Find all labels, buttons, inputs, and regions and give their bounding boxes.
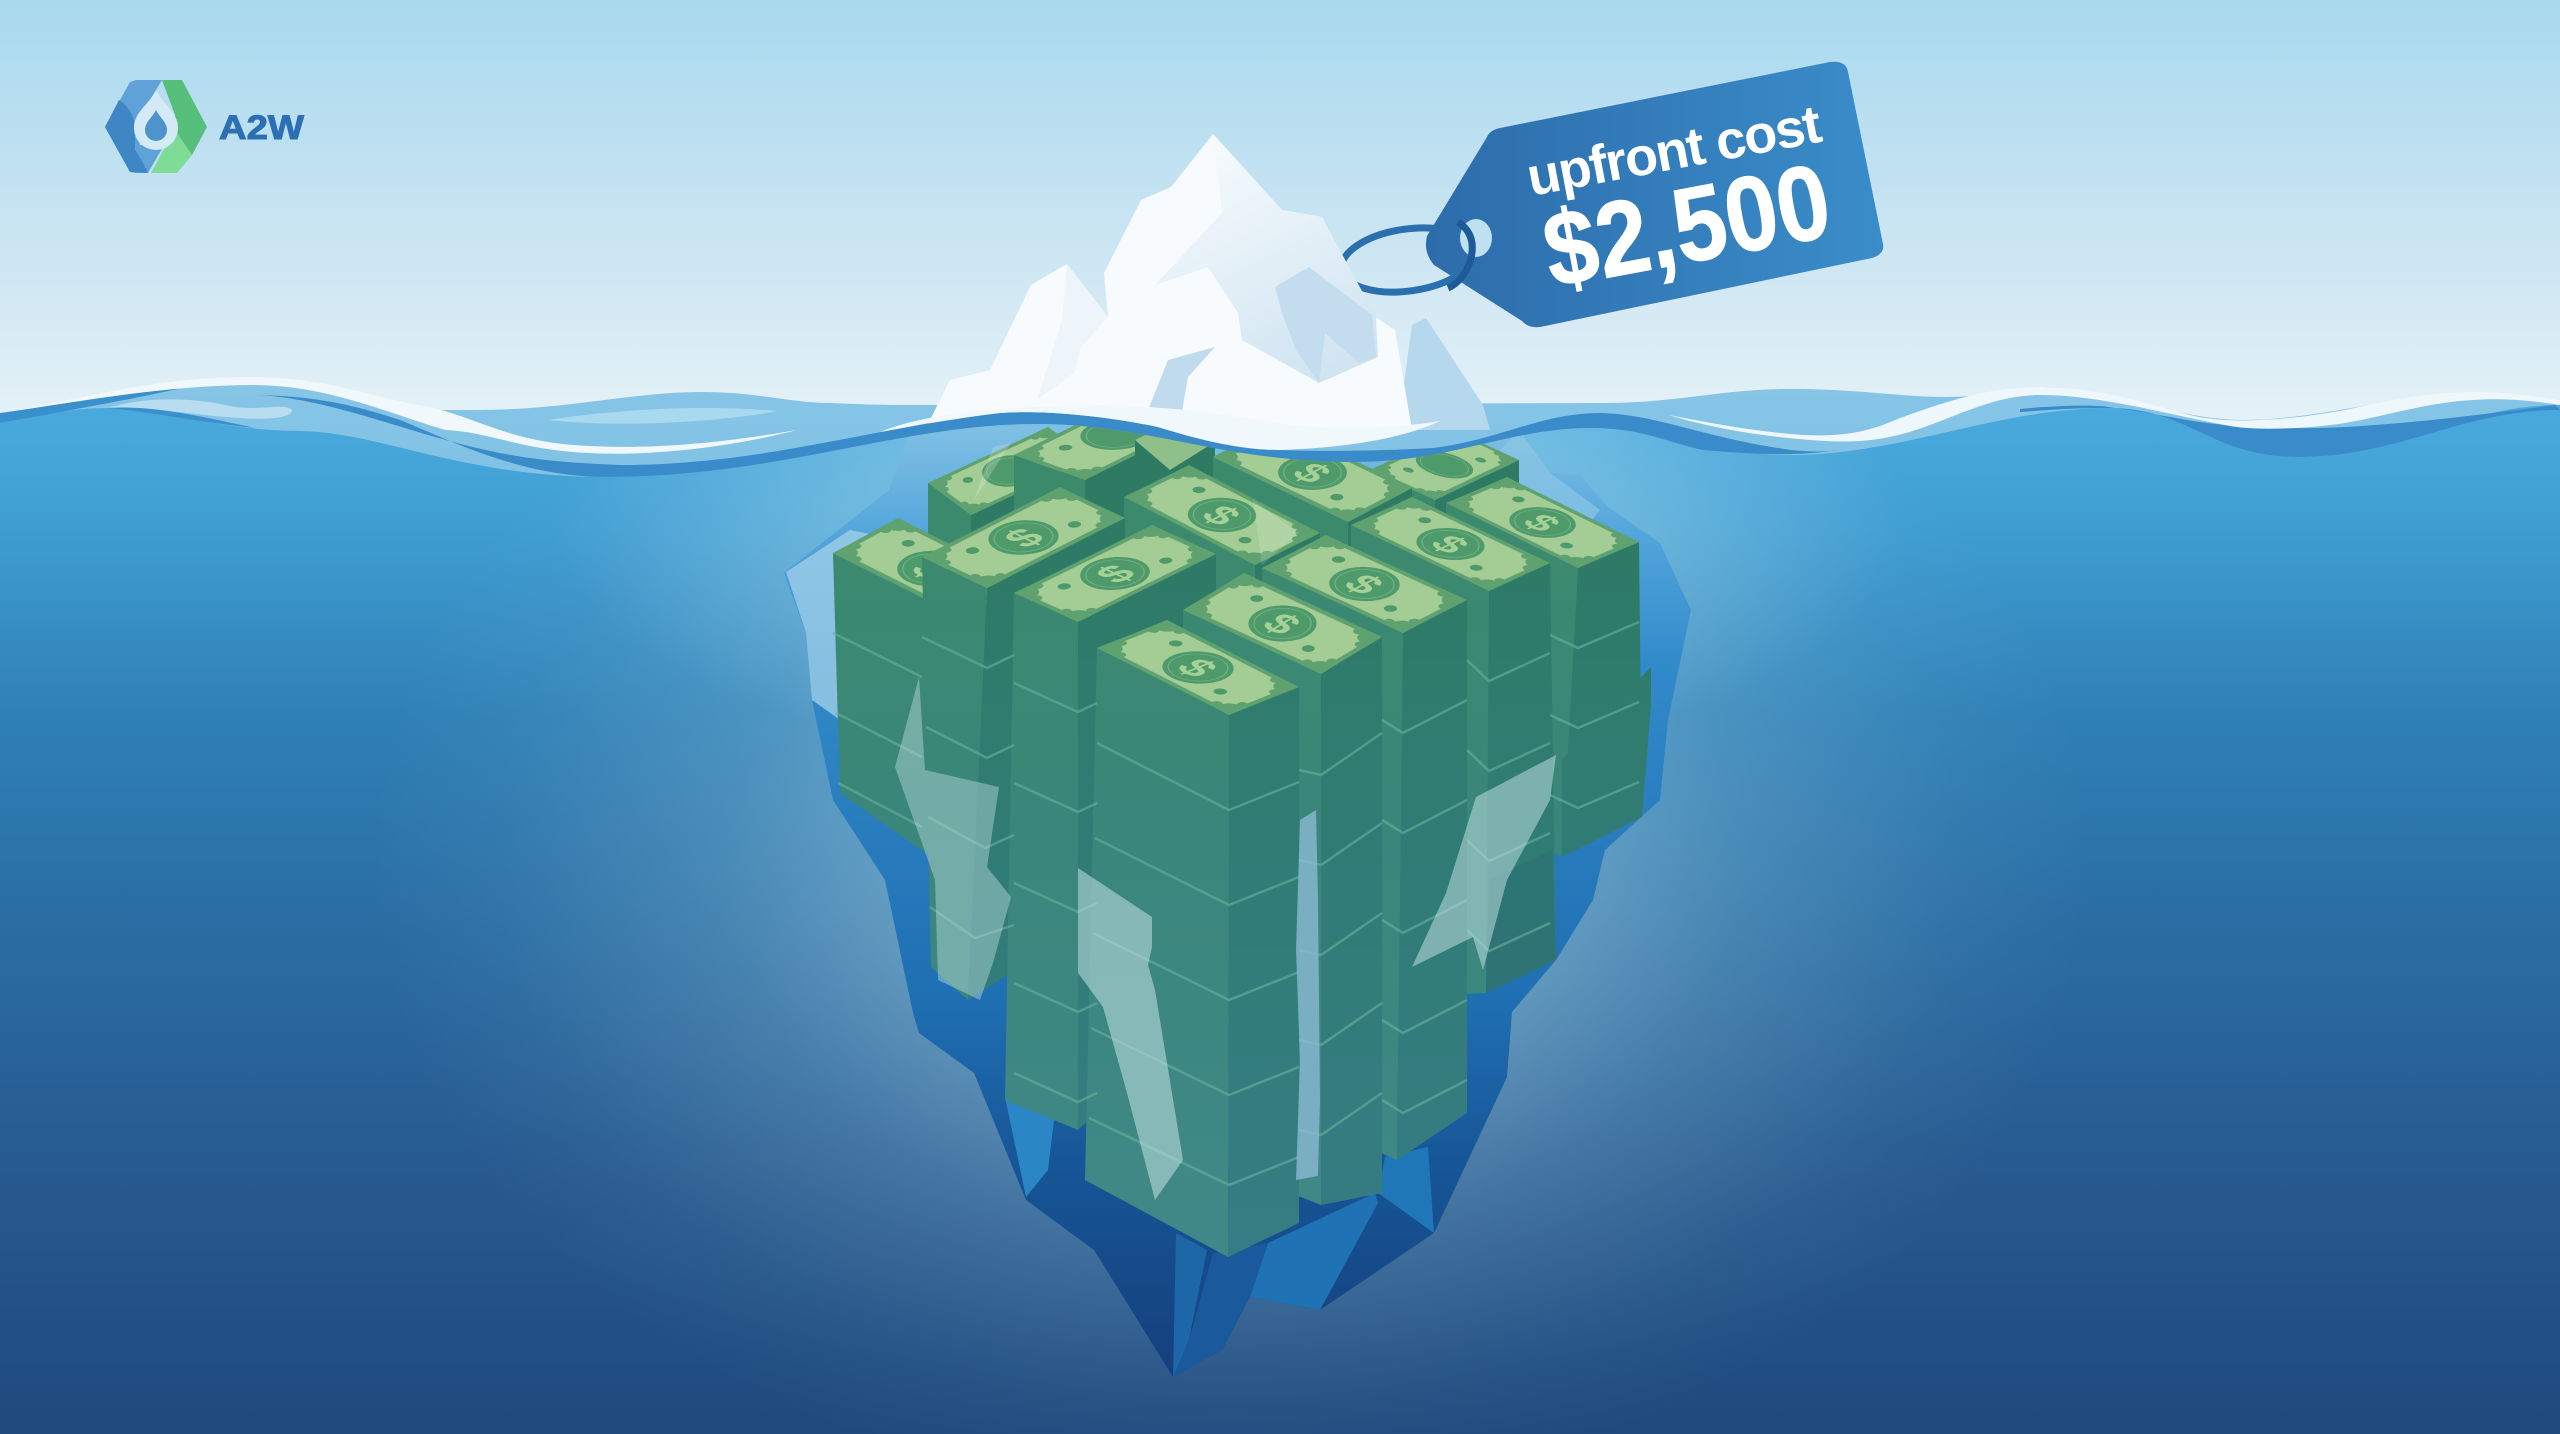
iceberg tip dark facet (1173, 1243, 1268, 1377)
ice streak centre left (1078, 868, 1183, 1200)
iceberg tip above water (925, 134, 1490, 430)
submerged iceberg and money (784, 386, 1691, 1377)
stack J front centre (1176, 570, 1388, 1205)
stack M left centre (1005, 522, 1223, 1130)
ice streak centre vertical (1296, 810, 1320, 1180)
iceberg shaded face (1155, 134, 1378, 383)
logo blue half (105, 80, 163, 173)
stack S front tallest: $ (1165, 654, 1230, 682)
back water surface (0, 385, 2560, 520)
stack F right: $ (1512, 510, 1570, 536)
wave details (0, 377, 2560, 477)
iceberg tip facet (1173, 1233, 1207, 1377)
stack S front tallest (1085, 617, 1306, 1257)
stack K left (915, 484, 1132, 1000)
centre white crest (880, 405, 1440, 450)
iceberg lower left facet (1005, 1097, 1054, 1197)
logo drop (145, 110, 167, 141)
left dark sliver (0, 386, 191, 423)
stack D top centre (1213, 450, 1412, 609)
stack I right centre front (1255, 532, 1474, 1160)
thin crest shadow (108, 408, 255, 428)
stack D top centre: $ (1281, 457, 1342, 489)
dark wave band (258, 395, 1838, 477)
logo drop outline (134, 90, 178, 150)
ice streak left (895, 677, 1011, 1000)
sea body (0, 405, 2560, 1434)
logo green upper (162, 80, 207, 155)
stack I right centre front: $ (1333, 569, 1395, 600)
stack H centre (1124, 465, 1320, 582)
logo wordmark: A2W (219, 109, 305, 147)
iceberg main white mass (925, 134, 1412, 430)
tag body (1426, 62, 1883, 327)
string over tag (1448, 222, 1472, 288)
stack C back centre (1135, 435, 1215, 544)
logo (105, 80, 305, 173)
iceberg lower shadow facet (1148, 347, 1215, 417)
submerged iceberg body (784, 425, 1691, 1377)
ice streak right (1412, 755, 1556, 970)
stack A back left (928, 427, 1086, 636)
sky background (0, 0, 2560, 440)
translucent left facet (974, 443, 1011, 500)
stack K left: $ (993, 522, 1055, 553)
iceberg right lower facet (1378, 1147, 1434, 1233)
stack N far left (833, 518, 1012, 855)
tag price: $2,500 (1535, 142, 1839, 311)
stack B back (1014, 426, 1166, 536)
stack F right (1440, 474, 1651, 857)
translucent top facet (1253, 500, 1299, 565)
tag hole (1460, 219, 1492, 257)
stack E back right (1370, 444, 1519, 570)
soft highlight on back water (548, 408, 778, 424)
logo blue shade (105, 100, 148, 173)
stack seam lines (833, 622, 1639, 1185)
iceberg darker facet (1275, 267, 1376, 383)
iceberg left spike shade (1037, 264, 1108, 400)
price tag (1426, 62, 1883, 327)
iceberg upper right light facet (1500, 430, 1600, 560)
right white crest (1669, 387, 2560, 441)
iceberg centre lower facet (1250, 1193, 1378, 1310)
stack G right centre: $ (1420, 530, 1480, 558)
right dark wave band (2020, 405, 2560, 457)
small crest highlight (108, 399, 292, 419)
stack J front centre: $ (1252, 607, 1312, 640)
stack M left centre: $ (1085, 559, 1146, 588)
stack H centre: $ (1191, 500, 1252, 531)
stack N far left: $ (900, 553, 961, 585)
price tag string loop (1337, 220, 1479, 300)
stack G right centre (1344, 494, 1556, 1000)
underwater light glow (510, 424, 1950, 1400)
iceberg far right spike (1399, 318, 1490, 430)
left white crest (0, 377, 797, 454)
tag label: upfront cost (1522, 94, 1826, 208)
money stacks (826, 386, 1651, 1257)
logo green lower (151, 133, 192, 173)
iceberg upper left light facet (786, 530, 887, 718)
